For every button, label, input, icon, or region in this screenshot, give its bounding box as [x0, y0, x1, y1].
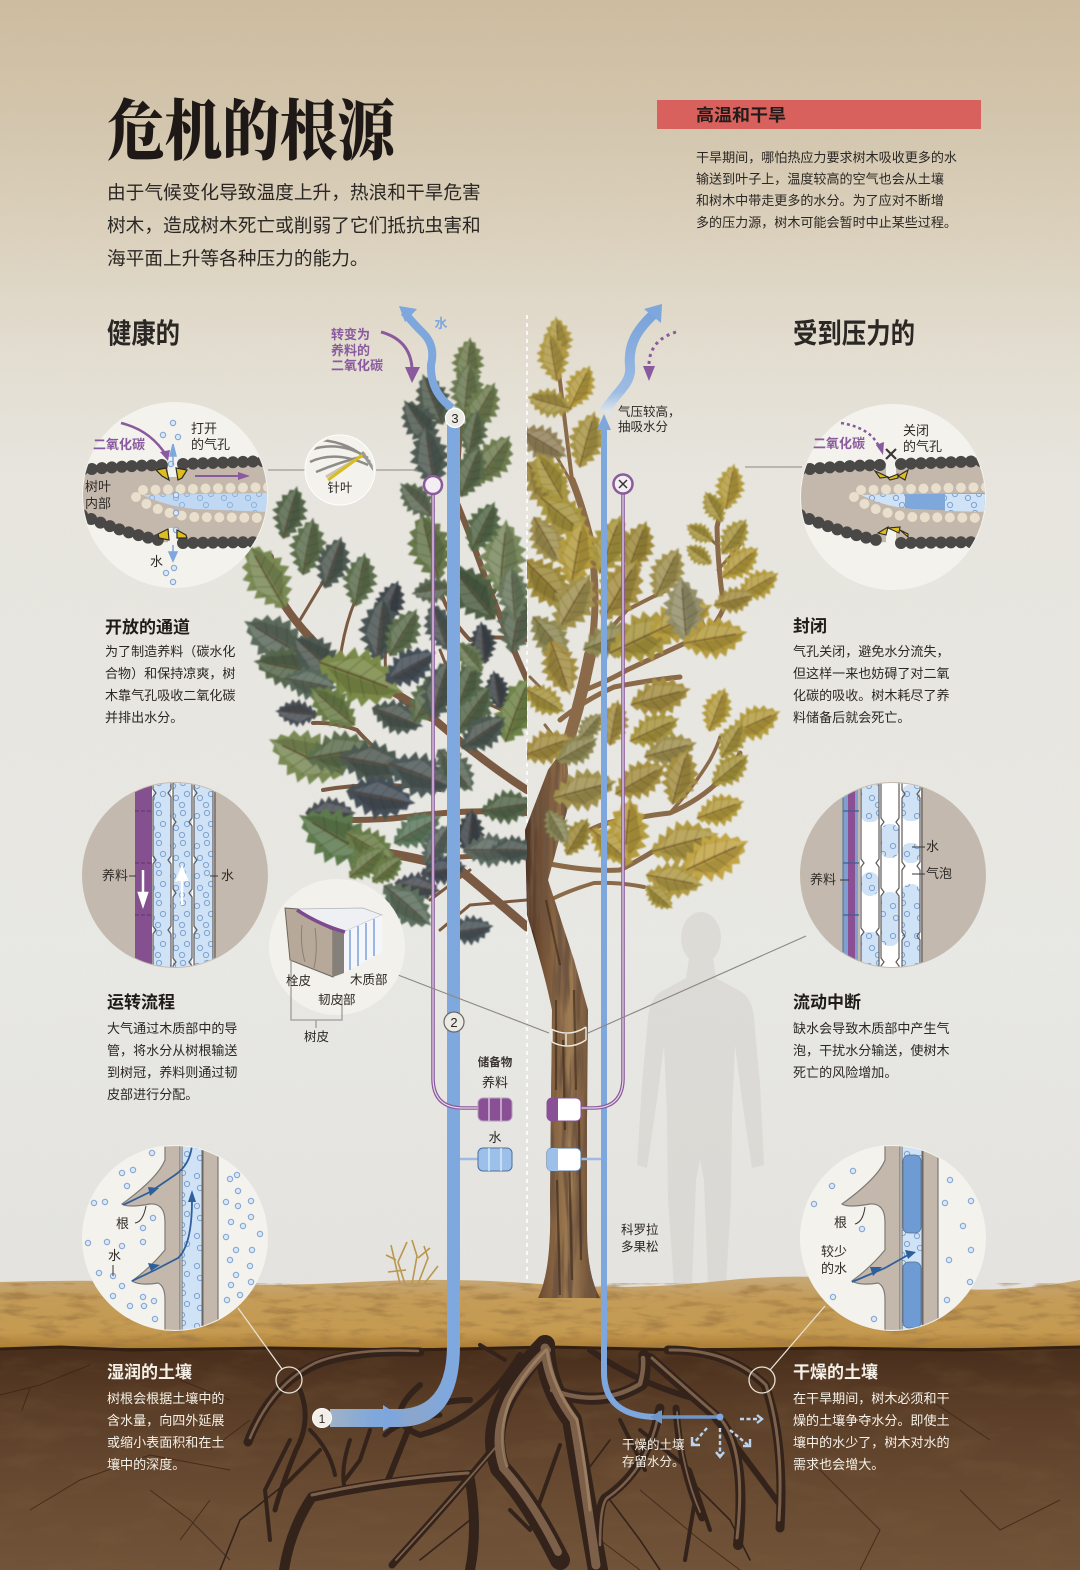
text block: closing: 气孔关闭，避免水分流失， — [793, 644, 950, 659]
soil sample ring: moist — [238, 1308, 302, 1393]
heading: stressed: 受到压力的 — [793, 318, 915, 349]
panel: interrupted flow circle: 养料 — [810, 872, 836, 887]
bark labels with bracket: 韧皮部 — [318, 992, 356, 1007]
text block: dry soil: 燥的土壤争夺水分。即使土 — [793, 1413, 950, 1428]
panel: open stomata circle: 内部 — [85, 496, 111, 511]
panel: closed stomata circle: 二氧化碳 — [813, 436, 865, 451]
text block: moist soil: 壤中的深度。 — [107, 1457, 185, 1472]
heat and drought text — [696, 150, 957, 230]
number marker 1 — [312, 1408, 332, 1428]
trunk band marker — [551, 1027, 586, 1046]
label: CO2 becomes food: 二氧化碳 — [331, 358, 383, 373]
title: 危机的根源 — [107, 96, 399, 169]
text block: dry soil: 在干旱期间，树木必须和干 — [793, 1391, 950, 1406]
panel: open stomata circle: 树叶 — [85, 479, 111, 494]
water flow: healthy side stream — [330, 306, 460, 1431]
text block: transport process: 到树冠，养料则通过韧 — [107, 1065, 237, 1080]
text block: open passage — [105, 617, 235, 725]
number marker 3: 3 — [451, 411, 459, 426]
text block: dry soil: 干燥的土壤 — [793, 1362, 878, 1382]
heat and drought text: 干旱期间，哪怕热应力要求树木吸收更多的水 — [696, 150, 957, 165]
heat and drought text: 和树木中带走更多的水分。为了应对不断增 — [696, 193, 944, 208]
intro paragraph — [107, 182, 481, 269]
label: species: 多果松 — [621, 1240, 659, 1254]
label: CO2 becomes food: 转变为 — [331, 327, 370, 342]
soil: sand layer — [0, 1277, 1080, 1351]
soil: deep dark layer — [0, 1347, 1080, 1570]
text block: dry soil: 需求也会增大。 — [793, 1457, 884, 1472]
text block: closing: 化碳的吸收。树木耗尽了养 — [793, 688, 950, 703]
label: high pressure: 抽吸水分 — [618, 420, 668, 434]
heat and drought text: 输送到叶子上，温度较高的空气也会从土壤 — [696, 172, 944, 186]
panel: interrupted flow circle: 水 — [926, 839, 939, 854]
text block: transport process: 大气通过木质部中的导 — [107, 1021, 237, 1036]
text block: transport process: 管，将水分从树根输送 — [107, 1043, 237, 1058]
label: dry soil holds water — [622, 1437, 685, 1469]
reserves: food healthy, full — [478, 1098, 512, 1121]
panel: healthy sap transport circle: 水 — [221, 868, 234, 883]
panel: dry soil root circle — [800, 1140, 986, 1340]
intro paragraph: 海平面上升等各种压力的能力。 — [107, 248, 369, 269]
text block: dry soil — [793, 1362, 950, 1472]
text block: open passage: 木靠气孔吸收二氧化碳 — [105, 688, 235, 703]
panel: closed stomata circle: 的气孔 — [903, 439, 942, 454]
arrow: CO2 into healthy tree — [381, 332, 420, 383]
panel: open stomata circle — [78, 402, 270, 588]
text block: closing: 但这样一来也妨碍了对二氧 — [793, 666, 950, 681]
text block: open passage: 并排出水分。 — [105, 710, 183, 725]
text block: flow interrupted: 死亡的风险增加。 — [793, 1065, 897, 1080]
heat and drought text: 多的压力源，树木可能会暂时中止某些过程。 — [696, 215, 957, 230]
label: water: 水 — [434, 316, 448, 331]
intro paragraph: 由于气候变化导致温度上升，热浪和干旱危害 — [107, 182, 481, 203]
bark labels with bracket: 树皮 — [304, 1029, 329, 1044]
text block: closing: 料储备后就会死亡。 — [793, 710, 910, 725]
tree: trunk — [525, 758, 600, 1298]
number marker 3 — [446, 408, 464, 428]
bark labels with bracket — [286, 960, 388, 1044]
number marker 2: 2 — [450, 1015, 458, 1030]
text block: flow interrupted: 泡，干扰水分输送，使树木 — [793, 1043, 950, 1058]
panel: open stomata circle: 水 — [150, 554, 163, 569]
reserves: food stressed, depleted — [547, 1098, 581, 1121]
panel: interrupted flow circle — [800, 775, 986, 975]
panel: open stomata circle: 的气孔 — [191, 437, 230, 452]
label: species — [621, 1222, 659, 1254]
label: dry soil holds water: 存留水分。 — [622, 1455, 685, 1469]
text block: moist soil: 含水量，向四外延展 — [107, 1413, 224, 1428]
text block: open passage: 为了制造养料（碳水化 — [105, 644, 235, 659]
text block: moist soil — [107, 1362, 224, 1472]
panel: healthy sap transport circle — [82, 775, 268, 975]
label: dry soil holds water: 干燥的土壤 — [622, 1437, 685, 1452]
leader lines — [268, 467, 806, 1033]
panel: open stomata circle: 打开 — [191, 421, 217, 436]
panel: open stomata circle: 二氧化碳 — [93, 437, 145, 452]
tree: branches healthy side — [270, 375, 527, 930]
intro paragraph: 树木，造成树木死亡或削弱了它们抵抗虫害和 — [107, 215, 481, 236]
panel: needle inset — [305, 435, 375, 505]
panel: dry soil root circle: 根 — [834, 1215, 847, 1230]
divider between healthy and stressed — [526, 315, 528, 1282]
food flow outline: healthy side — [424, 476, 478, 1108]
text block: flow interrupted — [793, 992, 950, 1080]
roots — [220, 1345, 781, 1570]
food flow outline: stressed side — [581, 474, 632, 1108]
number marker 2 — [444, 1012, 464, 1032]
bark labels with bracket: 木质部 — [350, 972, 388, 987]
text block: transport process: 皮部进行分配。 — [107, 1087, 198, 1102]
reserves: water stressed, depleted — [547, 1148, 581, 1171]
text block: open passage: 开放的通道 — [105, 617, 190, 637]
panel: moist soil root circle: 水 — [108, 1248, 121, 1263]
soil sample ring: dry — [749, 1306, 825, 1393]
panel: heat and drought header: 高温和干旱 — [696, 105, 786, 125]
panel: heat and drought header — [657, 100, 981, 129]
reserves labels: 养料 — [482, 1075, 508, 1090]
heading: healthy: 健康的 — [107, 318, 180, 349]
text block: closing — [793, 617, 950, 725]
text block: moist soil: 树根会根据土壤中的 — [107, 1391, 224, 1406]
small shrub — [386, 1240, 438, 1284]
tree: foliage stressed side — [527, 316, 781, 910]
panel: closed stomata circle — [796, 404, 988, 590]
tree: foliage healthy side — [241, 336, 527, 946]
water connector lines — [460, 1158, 601, 1160]
arrow: CO2 blocked dotted — [643, 332, 676, 381]
panel: dry soil root circle: 较少 — [821, 1244, 847, 1259]
label: high pressure: 气压较高， — [618, 404, 681, 419]
panel: interrupted flow circle: 气泡 — [926, 866, 952, 881]
water flow: stressed side stream — [597, 304, 724, 1424]
panel: healthy sap transport circle: 养料 — [102, 868, 128, 883]
reserves labels: 储备物 — [478, 1055, 513, 1069]
label: CO2 becomes food — [331, 327, 383, 373]
human silhouette for scale — [637, 912, 764, 1285]
text block: flow interrupted: 缺水会导致木质部中产生气 — [793, 1021, 950, 1036]
reserves labels — [478, 1055, 513, 1145]
label: CO2 becomes food: 养料的 — [331, 343, 370, 358]
panel: closed stomata circle: 关闭 — [903, 423, 929, 438]
label: species: 科罗拉 — [621, 1222, 659, 1237]
dashed arrows: moisture leaving dry soil — [692, 1415, 762, 1457]
bark labels with bracket: 栓皮 — [286, 973, 311, 988]
text block: moist soil: 或缩小表面积和在土 — [107, 1435, 224, 1450]
text block: open passage: 合物）和保持凉爽，树 — [105, 666, 235, 681]
text block: flow interrupted: 流动中断 — [793, 992, 861, 1012]
panel: needle inset: 针叶 — [327, 480, 353, 495]
text block: transport process: 运转流程 — [107, 993, 175, 1012]
reserves labels: 水 — [488, 1130, 502, 1145]
text block: closing: 封闭 — [793, 617, 827, 636]
reserves: water healthy, full — [478, 1148, 512, 1171]
number marker 1: 1 — [319, 1412, 326, 1426]
panel: bark cross-section circle — [269, 879, 405, 1015]
text block: dry soil: 壤中的水少了，树木对水的 — [793, 1435, 950, 1450]
text block: transport process — [107, 993, 237, 1102]
panel: moist soil root circle — [82, 1140, 268, 1340]
panel: dry soil root circle: 的水 — [821, 1261, 847, 1276]
panel: moist soil root circle: 根 — [116, 1216, 129, 1231]
label: high pressure — [618, 404, 681, 434]
text block: moist soil: 湿润的土壤 — [107, 1362, 192, 1382]
tree: branches stressed side — [530, 365, 760, 900]
